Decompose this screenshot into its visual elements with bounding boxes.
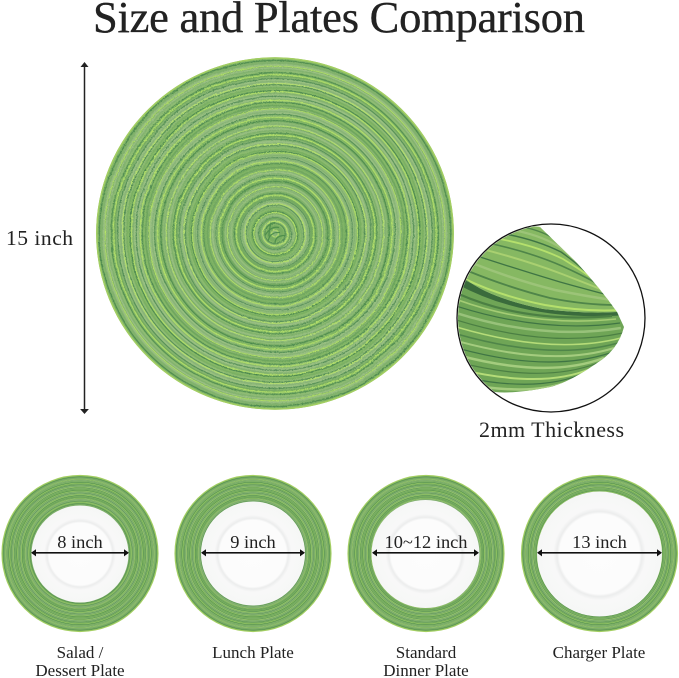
caption: charger plate: Charger Plate: [553, 643, 645, 662]
caption: salad / dessert plate: [35, 643, 125, 678]
plate: standard dinner: [348, 475, 504, 632]
caption: lunch plate: Lunch Plate: [212, 643, 294, 662]
upper fold of mat: [466, 226, 617, 313]
caption: standard dinner plate: Standard: [396, 643, 457, 662]
size arrow: [372, 549, 479, 556]
plate: charger: [521, 475, 678, 632]
plate: salad / dessert: 8 inch: [57, 532, 103, 552]
size arrow: [537, 549, 662, 556]
folded mat: [458, 226, 624, 392]
main round placemat: [96, 57, 454, 410]
plate: lunch: [175, 475, 331, 632]
plate: lunch: 9 inch: [230, 532, 276, 552]
plate: charger: 13 inch: [572, 532, 627, 552]
plate: salad / dessert: [2, 475, 158, 632]
lower layer of mat: [458, 280, 624, 392]
caption: salad / dessert plate: Salad /: [57, 643, 104, 662]
centre swirl: [260, 219, 290, 248]
size arrow: [31, 549, 129, 556]
thickness detail circle: [450, 215, 645, 412]
caption: standard dinner plate: [383, 643, 469, 678]
size arrow: [201, 549, 305, 556]
height label: 15 inch: [6, 226, 73, 250]
thickness label: 2mm Thickness: [479, 417, 624, 442]
plate: standard dinner: 10~12 inch: [384, 532, 468, 552]
height arrow: 15 inch: [80, 62, 89, 414]
